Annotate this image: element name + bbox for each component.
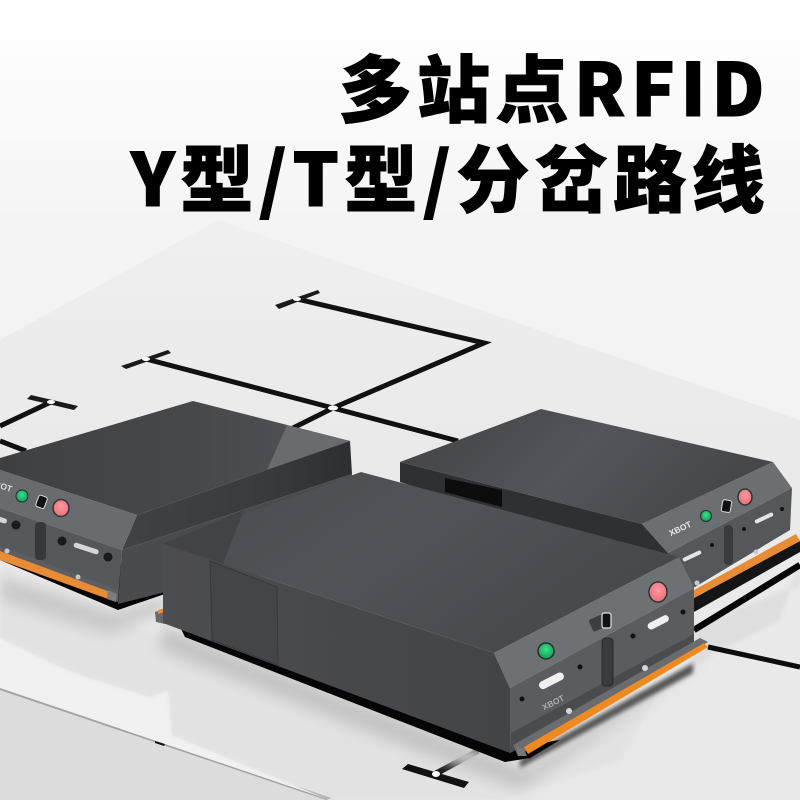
screw 2 [642, 665, 648, 671]
bumper base [513, 638, 708, 756]
screw 1 [4, 548, 10, 554]
red stop button [738, 489, 752, 505]
white slot 1 [754, 512, 774, 524]
key switch [35, 495, 48, 509]
marker dot 1 [293, 297, 301, 301]
floor edge line [0, 687, 332, 800]
top face [0, 401, 350, 515]
side notch [445, 478, 502, 507]
rear bumper stub [155, 609, 165, 624]
under-bumper shadow [520, 663, 693, 768]
white slot 2 [646, 614, 670, 631]
green button [16, 490, 28, 502]
marker dot 2 [142, 357, 150, 361]
XBOT label: XBOT [540, 692, 567, 712]
bumper cap [107, 590, 117, 602]
junction dot [328, 406, 338, 410]
top highlight [267, 425, 350, 470]
top face [400, 409, 773, 524]
screw 1 [754, 550, 758, 554]
lower front shade [510, 634, 694, 753]
top face [163, 472, 679, 653]
light strip on floor [0, 638, 325, 798]
hole 2 [58, 536, 66, 546]
top reflection [163, 510, 244, 566]
rear bumper orange [158, 608, 165, 614]
hole 3 [680, 610, 686, 614]
white slot 2 [0, 515, 8, 524]
vertical slot [724, 525, 733, 565]
robot: left [0, 401, 352, 635]
floor shadow [160, 625, 710, 790]
upper front panel [494, 557, 694, 688]
route: line under right robot [694, 565, 800, 630]
green button [538, 643, 554, 659]
floor edge mark [155, 741, 165, 746]
side face [122, 441, 352, 550]
upper front panel [0, 470, 137, 550]
station marker 4 [402, 764, 469, 788]
floor platform [0, 220, 800, 800]
white slot 1 [73, 542, 99, 555]
switch head [602, 613, 611, 628]
orange bumper [524, 643, 708, 754]
orange bumper [0, 551, 110, 599]
title line 2: Y型/T型/分岔路线 [130, 122, 770, 228]
hole 3 [104, 552, 112, 562]
bumper base [0, 546, 118, 602]
floor guide lines [0, 290, 800, 788]
lower front panel [668, 488, 792, 590]
lower side [118, 474, 352, 604]
route: left [0, 402, 51, 426]
reflection below center robot [0, 590, 660, 800]
hole 3 [710, 543, 714, 547]
hole 1 [742, 527, 746, 531]
white slot 2 [682, 550, 702, 562]
XBOT label: XBOT [667, 519, 694, 538]
key switch [588, 613, 611, 632]
hole 1 [12, 520, 20, 530]
floor lower-left edge area [0, 688, 330, 800]
route: upper branch [285, 299, 484, 432]
screw 2 [694, 580, 700, 586]
title line 1: 多站点RFID [339, 32, 770, 138]
hole 4 [520, 696, 524, 702]
screw 1 [566, 708, 572, 714]
route: lower right line [708, 647, 800, 667]
station marker 2 [121, 350, 171, 369]
bumper cap [516, 746, 527, 756]
contact shadow [180, 627, 560, 762]
white slot 1 [538, 671, 565, 690]
lower front panel [0, 508, 122, 600]
door panel [210, 561, 278, 665]
green button [700, 510, 712, 522]
reflection right [690, 560, 800, 670]
shadow [0, 535, 165, 610]
side face [400, 462, 700, 580]
route: bottom stub [435, 751, 478, 774]
switch base [588, 613, 610, 632]
route: left lower stub [0, 441, 26, 451]
vertical slot [602, 638, 613, 686]
side face [163, 544, 510, 753]
hole 1 [578, 664, 582, 670]
robot: center [155, 472, 710, 790]
upper front panel [642, 462, 792, 553]
under-bumper shadow [694, 541, 800, 612]
hole 2 [780, 507, 784, 511]
vertical slot [35, 522, 46, 560]
title [130, 32, 770, 228]
orange bumper [694, 534, 800, 598]
marker dot 4 [432, 771, 440, 777]
lower front panel [510, 588, 694, 753]
route: main line [146, 359, 458, 441]
station marker 3 [27, 395, 78, 410]
screw 2 [76, 574, 80, 580]
station marker 1 [275, 290, 320, 309]
red stop button [649, 582, 667, 602]
marker dot 3 [47, 400, 55, 404]
red stop button [53, 500, 69, 516]
hole 2 [630, 634, 636, 638]
robot: right [400, 409, 800, 612]
floor shadow blur [0, 575, 165, 635]
key switch [721, 499, 732, 513]
